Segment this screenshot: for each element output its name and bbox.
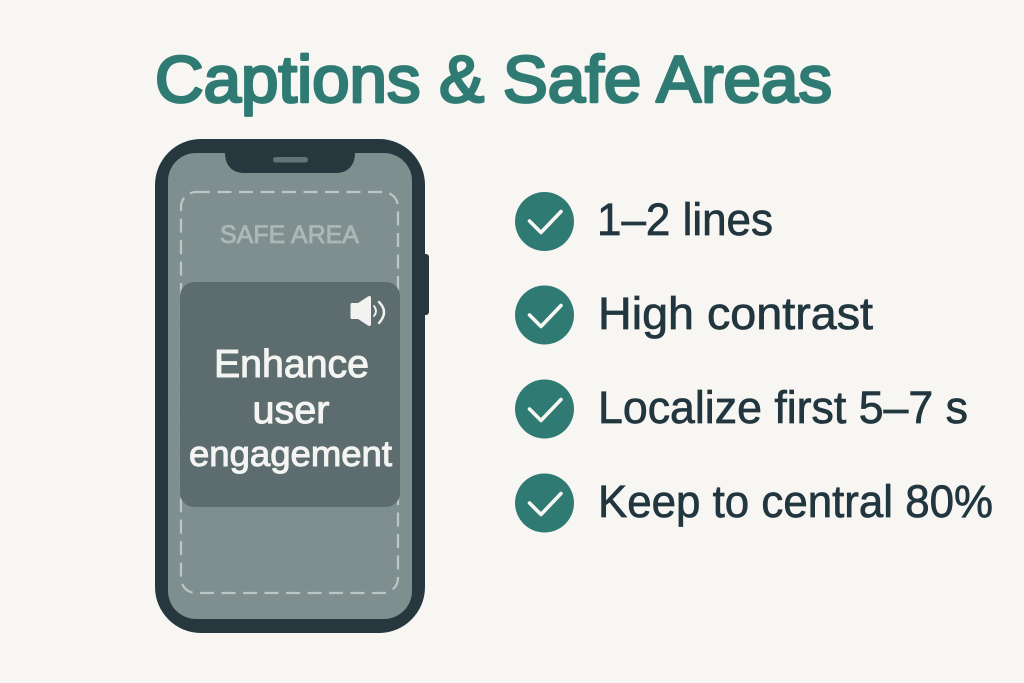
safe area dashed outline bbox=[181, 192, 398, 593]
checklist bbox=[515, 192, 993, 532]
caption text: Enhance bbox=[214, 343, 369, 386]
notch bbox=[225, 150, 355, 173]
safe area label: SAFE AREA bbox=[220, 221, 359, 249]
phone illustration bbox=[155, 139, 429, 633]
item: Localize first 5–7 s: Localize first 5–7 s bbox=[598, 382, 968, 433]
notch speaker bbox=[273, 157, 308, 162]
caption panel bbox=[180, 282, 400, 507]
item: 1–2 lines bbox=[515, 192, 773, 251]
item: High contrast: High contrast bbox=[598, 288, 874, 339]
phone body bbox=[155, 139, 425, 633]
item: 1–2 lines: 1–2 lines bbox=[597, 194, 773, 245]
phone side button bbox=[418, 254, 429, 315]
phone screen bbox=[168, 153, 412, 619]
item: High contrast bbox=[515, 286, 874, 344]
caption text: user bbox=[252, 389, 330, 432]
icon: speaker bbox=[350, 296, 384, 326]
item: Keep to central 80%: Keep to central 80% bbox=[598, 476, 993, 527]
title: Captions & Safe Areas bbox=[155, 42, 832, 116]
caption text bbox=[189, 343, 392, 474]
caption text: engagement bbox=[189, 433, 392, 474]
